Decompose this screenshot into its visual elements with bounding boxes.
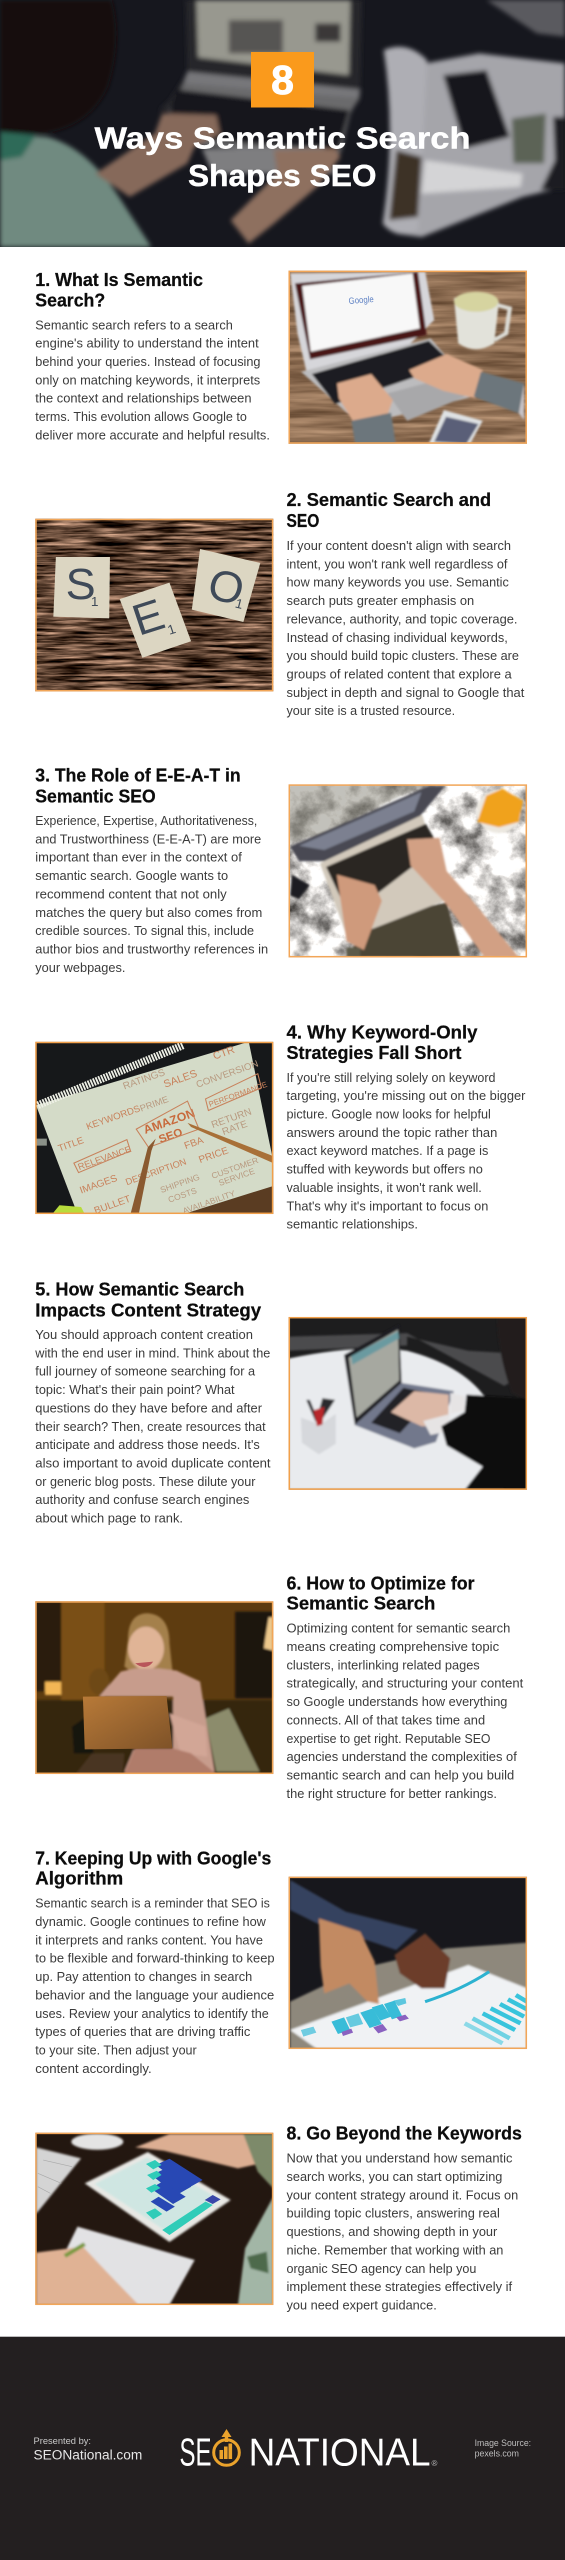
body text 4: answers around the topic rather than	[286, 1126, 497, 1140]
image: SEO letter tiles on wood	[35, 519, 273, 691]
heading 7	[35, 1847, 271, 1888]
body text 2: subject in depth and signal to Google that	[286, 686, 525, 700]
body text 2: Instead of chasing individual keywords,	[286, 631, 508, 645]
heading 4: 4. Why Keyword-Only	[286, 1022, 478, 1043]
image: laptop with Google on wooden desk	[288, 271, 527, 444]
body text 3: recommend content that not only	[35, 887, 227, 901]
heading 6: 6. How to Optimize for	[286, 1572, 475, 1593]
body text 7: types of queries that are driving traffic	[35, 2025, 250, 2039]
image: notepad with Amazon SEO mind map: RATE	[221, 1119, 249, 1138]
body text 6: Optimizing content for semantic search	[286, 1622, 510, 1636]
body text 2: how many keywords you use. Semantic	[286, 576, 509, 590]
image: notepad with Amazon SEO mind map: AMAZON	[141, 1106, 197, 1137]
image: notepad with Amazon SEO mind map: IMAGES	[78, 1173, 119, 1196]
image: laptop with Google on wooden desk: Google	[348, 294, 374, 306]
hero photo: person typing on laptop	[0, 0, 565, 247]
footer	[0, 2337, 565, 2560]
body text 2: relevance, authority, and topic coverage.	[286, 612, 518, 626]
body text 3: matches the query but also comes from	[35, 906, 262, 920]
logo: SEO National: NATIONAL	[249, 2432, 431, 2475]
body text 7	[35, 1897, 275, 2076]
panel: section 2	[35, 489, 525, 718]
body text 5: anticipate and address those needs. It's	[35, 1438, 260, 1452]
body text 3: Experience, Expertise, Authoritativeness,	[35, 814, 257, 828]
body text 3: important than ever in the context of	[35, 851, 242, 865]
body text 5: or generic blog posts. These dilute your	[35, 1475, 255, 1489]
heading 3	[35, 765, 241, 806]
image: notepad with Amazon SEO mind map: PERFORMANCE	[207, 1080, 268, 1109]
body text 8: questions, and showing depth in your	[286, 2225, 497, 2239]
body text 5: with the end user in mind. Think about the	[34, 1346, 270, 1360]
body text 8: your content strategy around it. Focus on	[286, 2188, 518, 2202]
body text 8: Now that you understand how semantic	[286, 2152, 512, 2166]
image: notepad with Amazon SEO mind map: CONVERSION	[195, 1059, 260, 1091]
body text 8: you need expert guidance.	[286, 2298, 437, 2312]
image: woman on sofa with laptop in warm room	[35, 1601, 273, 1774]
heading 8: 8. Go Beyond the Keywords	[286, 2122, 522, 2143]
number badge	[251, 52, 314, 108]
body text 6: clusters, interlinking related pages	[286, 1658, 480, 1672]
heading 6: Semantic Search	[286, 1592, 435, 1613]
body text 2: If your content doesn't align with search	[286, 539, 511, 553]
image: notepad with Amazon SEO mind map: FBA	[183, 1135, 205, 1152]
body text 3: credible sources. To signal this, include	[35, 924, 254, 938]
body text 6	[286, 1622, 524, 1801]
body text 8: search works, you can start optimizing	[286, 2170, 502, 2184]
body text 5: questions do they have before and after	[35, 1401, 262, 1415]
image: SEO letter tiles on wood: O	[203, 560, 249, 615]
logo: SEO National: ®	[432, 2459, 438, 2468]
image: notepad with Amazon SEO mind map: RELEVANCE	[77, 1144, 133, 1172]
heading 7: Algorithm	[35, 1867, 123, 1888]
presented by: Presented by:	[34, 2436, 91, 2447]
body text 5: about which page to rank.	[35, 1512, 183, 1526]
image: notepad with Amazon SEO mind map: KEYWORDS	[85, 1104, 142, 1133]
body text 7: to be flexible and forward-thinking to keep	[35, 1952, 275, 1966]
body text 2: search puts greater emphasis on	[286, 594, 474, 608]
image: SEO letter tiles on wood: E	[127, 590, 171, 645]
title: Shapes SEO	[188, 159, 376, 193]
body text 1: terms. This evolution allows Google to	[35, 410, 247, 424]
image: notepad with Amazon SEO mind map: SALES	[162, 1068, 199, 1091]
body text 6: so Google understands how everything	[286, 1695, 507, 1709]
body text 5: authority and confuse search engines	[35, 1493, 249, 1507]
image: tablet with chart and notebook on dark desk	[35, 2133, 273, 2305]
panel: section 6	[35, 1572, 524, 1801]
heading 5: Impacts Content Strategy	[35, 1300, 262, 1320]
heading 7: 7. Keeping Up with Google's	[35, 1847, 271, 1868]
body text 6: means creating comprehensive topic	[286, 1640, 499, 1654]
body text 5: also important to avoid duplicate content	[35, 1456, 271, 1470]
panel: section 5	[34, 1278, 527, 1526]
body text 3: your webpages.	[35, 961, 125, 975]
image: hands typing on laptop on marble table	[289, 784, 527, 957]
logo: SEO National: SE	[180, 2432, 212, 2475]
image: notepad with Amazon SEO mind map: TITLE	[57, 1135, 85, 1154]
body text 2: you should build topic clusters. These are	[286, 649, 519, 663]
panel: section 8	[35, 2122, 522, 2312]
heading 1	[35, 269, 203, 310]
icon: logo O with chart and arrow	[214, 2429, 239, 2465]
body text 5: topic: What's their pain point? What	[35, 1383, 235, 1397]
body text 6: semantic search and can help you build	[286, 1768, 514, 1782]
image source	[475, 2438, 531, 2459]
heading 2: SEO	[286, 510, 319, 531]
body text 1: behind your queries. Instead of focusing	[35, 355, 260, 369]
body text 4: targeting, you're missing out on the bigger	[286, 1089, 525, 1103]
title	[94, 122, 470, 193]
body text 6: agencies understand the complexities of	[286, 1750, 517, 1764]
heading 5	[35, 1278, 262, 1320]
heading 5: 5. How Semantic Search	[35, 1278, 244, 1299]
image source: Image Source:	[475, 2438, 531, 2448]
image: notepad with Amazon SEO mind map: DESCRIPTION	[124, 1157, 188, 1187]
body text 2: your site is a trusted resource.	[286, 704, 455, 718]
body text 8: building topic clusters, answering real	[286, 2207, 500, 2221]
body text 7: content accordingly.	[35, 2062, 152, 2076]
presented by: SEONational.com	[34, 2448, 142, 2462]
image: notepad with Amazon SEO mind map: AVAILABILITY	[181, 1188, 237, 1216]
body text 7: dynamic. Google continues to refine how	[35, 1915, 267, 1929]
body text 1: engine's ability to understand the intent	[35, 337, 259, 351]
body text 5	[34, 1328, 271, 1526]
body text 4	[286, 1071, 525, 1232]
body text 7: uses. Review your analytics to identify the	[35, 2007, 269, 2021]
panel: section 7	[35, 1847, 527, 2076]
image: notepad with Amazon SEO mind map: RETURN	[210, 1107, 253, 1131]
body text 3: and Trustworthiness (E-E-A-T) are more	[35, 832, 261, 846]
body text 8	[286, 2152, 518, 2312]
heading 4: Strategies Fall Short	[286, 1042, 461, 1063]
body text 2: groups of related content that explore a	[286, 668, 512, 682]
heading 1: 1. What Is Semantic	[35, 269, 203, 290]
image: notepad with Amazon SEO mind map: SHIPPING	[159, 1172, 201, 1195]
body text 1: only on matching keywords, it interprets	[35, 373, 260, 387]
body text 7: up. Pay attention to changes in search	[35, 1970, 252, 1984]
body text 1: deliver more accurate and helpful results.	[35, 428, 270, 442]
image: SEO letter tiles on wood: 1	[234, 596, 245, 612]
heading 1: Search?	[35, 289, 105, 310]
presented by	[34, 2436, 142, 2462]
heading 4	[286, 1022, 478, 1063]
body text 8: niche. Remember that working with an	[286, 2243, 503, 2257]
body text 6: the right structure for better rankings.	[286, 1787, 497, 1801]
image: notepad with Amazon SEO mind map: PRICE	[197, 1145, 230, 1166]
number badge: 8	[271, 57, 294, 103]
image: notepad with Amazon SEO mind map: COSTS	[167, 1185, 198, 1205]
image: hands pointing at printed bar charts	[289, 1877, 527, 2049]
image source: pexels.com	[475, 2449, 519, 2459]
body text 1: Semantic search refers to a search	[35, 318, 233, 332]
body text 4: exact keyword matches. If a page is	[286, 1144, 488, 1158]
image: notepad with Amazon SEO mind map: CUSTOMER	[210, 1155, 260, 1181]
body text 8: organic SEO agency can help you	[286, 2262, 476, 2276]
body text 7: to your site. Then adjust your	[35, 2044, 197, 2058]
body text 5: full journey of someone searching for a	[35, 1365, 255, 1379]
title: Ways Semantic Search	[94, 122, 470, 156]
body text 4: That's why it's important to focus on	[286, 1199, 488, 1213]
body text 5: their search? Then, create resources that	[35, 1420, 266, 1434]
logo: SEO National	[180, 2429, 438, 2475]
body text 1: the context and relationships between	[35, 392, 251, 406]
body text 4: If you're still relying solely on keyword	[286, 1071, 496, 1085]
image: notepad with Amazon SEO mind map: SERVICE	[217, 1166, 256, 1188]
body text 2	[286, 539, 525, 718]
heading 2	[286, 489, 491, 531]
body text 4: picture. Google now looks for helpful	[286, 1108, 491, 1122]
image: SEO letter tiles on wood: S	[66, 561, 96, 609]
image: notepad with Amazon SEO mind map: CTR	[211, 1044, 237, 1062]
hero banner	[0, 0, 565, 247]
image: notepad with Amazon SEO mind map: PRIME	[139, 1094, 170, 1113]
heading 3: Semantic SEO	[35, 785, 156, 806]
image: notepad with Amazon SEO mind map: BULLET	[93, 1194, 132, 1217]
body text 7: Semantic search is a reminder that SEO is	[35, 1897, 270, 1911]
body text 2: intent, you won't rank well regardless of	[286, 557, 508, 571]
body text 3	[35, 814, 268, 975]
body text 4: valuable insights, it won't rank well.	[286, 1181, 482, 1195]
body text 3: semantic search. Google wants to	[35, 869, 228, 883]
body text 6: connects. All of that takes time and	[286, 1713, 485, 1727]
panel: section 1	[35, 269, 527, 444]
heading 2: 2. Semantic Search and	[286, 489, 491, 510]
body text 1	[35, 318, 270, 442]
image: notepad with Amazon SEO mind map	[35, 1042, 273, 1217]
body text 5: You should approach content creation	[35, 1328, 253, 1342]
panel: section 4	[35, 1022, 525, 1232]
image: woman using laptop at white table	[289, 1317, 527, 1490]
image: SEO letter tiles on wood: 1	[91, 594, 98, 609]
image: notepad with Amazon SEO mind map: RATINGS	[122, 1067, 167, 1092]
body text 6: strategically, and structuring your content	[286, 1677, 524, 1691]
heading 6	[286, 1572, 475, 1613]
panel: section 3	[35, 765, 527, 975]
body text 8: implement these strategies effectively if	[286, 2280, 513, 2294]
heading 3: 3. The Role of E-E-A-T in	[35, 765, 241, 786]
image: notepad with Amazon SEO mind map: SEO	[157, 1127, 185, 1146]
body text 6: expertise to get right. Reputable SEO	[286, 1732, 491, 1746]
body text 3: author bios and trustworthy references in	[35, 942, 268, 956]
body text 7: it interprets and ranks content. You have	[35, 1933, 263, 1947]
image: SEO letter tiles on wood: 1	[166, 621, 178, 638]
body text 7: behavior and the language your audience	[35, 1988, 274, 2002]
body text 4: semantic relationships.	[286, 1218, 418, 1232]
body text 4: stuffed with keywords but offers no	[286, 1163, 483, 1177]
